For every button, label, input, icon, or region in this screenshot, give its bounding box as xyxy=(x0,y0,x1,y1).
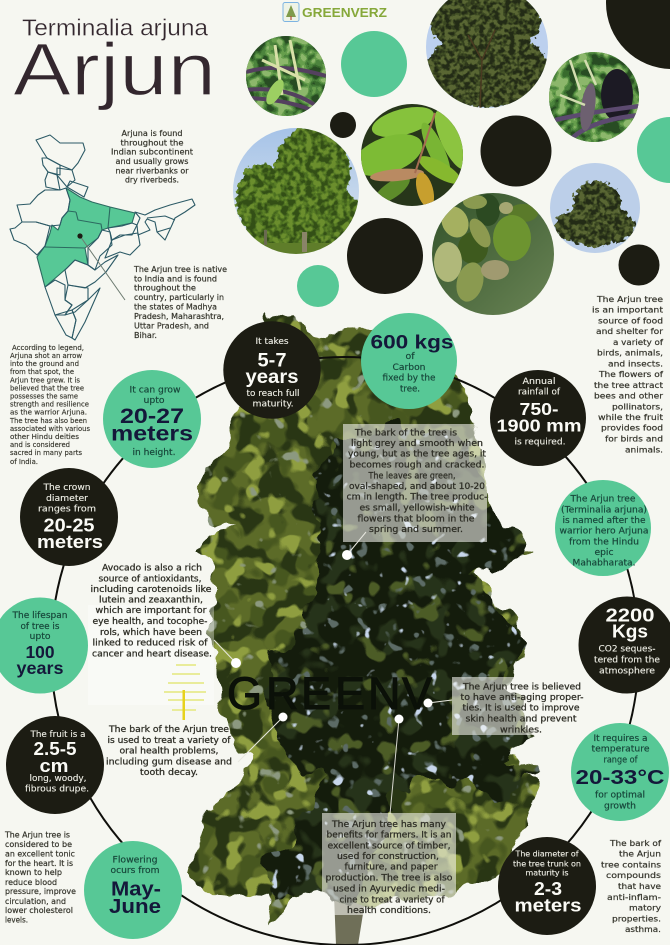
callout dot: antioxidants xyxy=(214,640,241,668)
text: native range xyxy=(133,265,227,340)
title: Arjun: Arjun xyxy=(13,28,216,111)
fact circle: trunk diameter xyxy=(498,837,596,935)
fact circle: rainfall: 1900 mm xyxy=(496,416,582,436)
text: anti-inflammatory xyxy=(601,839,661,934)
panel: anti-aging: wrinkles. xyxy=(500,725,542,735)
fact circle: fruit: cm xyxy=(40,756,68,776)
text: heart tonic: reduce blood xyxy=(5,878,57,887)
map of India xyxy=(10,135,195,340)
text: legend: as the warrior Arjuna. xyxy=(10,408,87,416)
text: oral health xyxy=(106,725,232,778)
panel: anti-aging: skin health and prevent xyxy=(466,715,577,725)
photo: tree crown against sky xyxy=(425,0,549,108)
text: wildlife: animals. xyxy=(625,445,663,454)
panel: farmers: cine to treat a variety of xyxy=(340,895,445,905)
text: anti-inflammatory: anti-inflam- xyxy=(607,893,661,902)
text: oral health: including gum disease and xyxy=(106,757,232,767)
callout dot: farmers xyxy=(390,714,404,814)
text: distribution: dry riverbeds. xyxy=(125,176,179,185)
fact circle: rainfall: Annual xyxy=(522,377,556,387)
fact circle: lifespan: upto xyxy=(30,632,50,642)
fact circle: lifespan: years xyxy=(16,658,64,678)
fact circle: CO2: Kgs xyxy=(612,620,648,641)
text: wildlife: while the fruit xyxy=(598,413,663,422)
photo: flowers and branches xyxy=(246,36,326,116)
text: distribution: Arjuna is found xyxy=(122,129,182,138)
panel: bark and leaves: es small, yellowish-white xyxy=(360,504,474,514)
fact circle: CO2: CO2 seques- xyxy=(598,645,656,655)
text: oral health: is used to treat a variety of xyxy=(108,736,231,746)
fact circle: fruit: fibrous drupe. xyxy=(25,785,89,795)
fact circle: name origin xyxy=(555,480,651,576)
fact circle: crown diameter: 20-25 xyxy=(44,515,94,536)
text: antioxidants: lutein and zeaxanthin, xyxy=(99,595,203,605)
text: native range: to India and is found xyxy=(134,274,217,283)
fact circle: crown diameter xyxy=(20,468,118,566)
text: distribution: Indian subcontinent xyxy=(111,148,193,157)
fact circle: name origin: is named after the xyxy=(562,516,646,526)
fact circle: height: 20-27 xyxy=(120,405,184,428)
panel: anti-aging xyxy=(452,677,586,735)
panel: bark and leaves: The bark of the tree is xyxy=(354,428,457,438)
text: legend: sacred in many parts xyxy=(10,448,82,457)
text: oral health: oral health problems, xyxy=(120,747,218,757)
fact circle: trunk diameter: the tree trunk on xyxy=(513,860,581,869)
fact circle: temperature: temperature xyxy=(592,745,650,755)
fact circle: name origin: (Terminalia arjuna) xyxy=(561,505,647,515)
panel: anti-aging: The Arjun tree is believed xyxy=(462,682,581,692)
panel: bark and leaves: becomes rough and cracked. xyxy=(350,460,484,470)
text: legend: and is considered xyxy=(10,440,70,449)
fact circle: flowering: June xyxy=(109,896,161,918)
fact circle: height: upto xyxy=(144,396,164,406)
text: wildlife: The flowers of xyxy=(598,370,663,379)
fact circle: name origin: The Arjun tree xyxy=(569,495,636,505)
panel: farmers: health conditions. xyxy=(347,906,431,916)
logo xyxy=(283,2,387,22)
fact circle: crown diameter: meters xyxy=(37,531,103,552)
fact circle: lifespan: The lifespan xyxy=(11,611,68,621)
text: antioxidants: eye health, and tocophe- xyxy=(92,617,208,627)
text: native range: country, particularly in xyxy=(134,293,224,302)
fact circle: temperature: for optimal xyxy=(595,791,645,801)
panel: farmers: used for construction, xyxy=(337,852,439,862)
text: legend: According to legend, xyxy=(12,343,84,352)
watermark text: GREENV xyxy=(227,668,432,719)
foliage: dark inner layer xyxy=(262,425,540,905)
text: legend: possesses the same xyxy=(10,392,78,400)
text: native range: Bihar. xyxy=(134,331,157,340)
ring connecting the facts xyxy=(51,357,639,945)
fact circle: temperature: growth xyxy=(604,801,636,811)
text: antioxidants: Avocado is also a rich xyxy=(102,563,202,573)
fact circle: fruit: 2.5-5 xyxy=(34,739,76,759)
panel: bark and leaves: cm in length. The tree produc- xyxy=(346,493,488,503)
fact circle: rainfall: rainfall of xyxy=(518,387,561,397)
watermark panel xyxy=(88,605,214,720)
text: heart tonic: known to help xyxy=(5,868,62,877)
panel: farmers: excellent source of timber, xyxy=(328,841,450,851)
text: legend: of India. xyxy=(10,457,38,466)
fact circle: flowering xyxy=(84,841,182,939)
callout dot: bark xyxy=(342,532,366,560)
fact circle: maturity: years xyxy=(246,367,298,388)
text: legend: Arjuna shot an arrow xyxy=(10,351,82,360)
fact circle: temperature: 20-33°C xyxy=(576,767,664,789)
text: anti-inflammatory: tree contains xyxy=(601,860,661,869)
fact circle: CO2: 2200 xyxy=(606,605,654,626)
fact circle: temperature: range of xyxy=(604,755,638,765)
text: heart tonic: considered to be xyxy=(5,840,72,849)
photo: winged fruits xyxy=(432,193,554,315)
text: legend: other Hindu deities xyxy=(10,432,79,441)
text: legend: strength and resilience xyxy=(10,400,89,408)
text: antioxidants: including carotenoids like xyxy=(90,585,212,595)
text: heart tonic: for the heart. It is xyxy=(5,859,73,868)
text: legend: The tree has also been xyxy=(9,416,87,425)
text: anti-inflammatory: The bark of xyxy=(609,839,661,848)
panel: farmers: benefits for farmers. It is an xyxy=(326,831,452,841)
panel: anti-aging: to have anti-aging proper- xyxy=(460,693,584,703)
highlighted states xyxy=(37,188,135,287)
text: wildlife: and insects. xyxy=(608,359,663,368)
text: antioxidants: rols, which have been xyxy=(100,628,202,638)
text: heart tonic: lower cholesterol xyxy=(5,906,73,915)
fact circle: fruit xyxy=(6,716,104,814)
text: anti-inflammatory: matory xyxy=(629,904,661,913)
fact circle: crown diameter: diameter xyxy=(46,494,88,504)
logo: GREENVERZ xyxy=(302,6,387,20)
fact circle: name origin: epic xyxy=(594,548,614,558)
text: wildlife: birds, animals, xyxy=(597,349,663,358)
foliage: olive layer xyxy=(184,310,540,920)
fact circle: maturity: 5-7 xyxy=(258,351,286,372)
map pointer xyxy=(77,233,125,300)
fact circle: fruit: long, woody, xyxy=(30,774,86,784)
fact circle: maturity: It takes xyxy=(256,337,289,347)
text: wildlife: is an important xyxy=(592,306,663,315)
tree illustration xyxy=(184,310,540,945)
fact circle: name origin: warrior hero Arjuna xyxy=(560,527,648,537)
panel: bark and leaves xyxy=(343,424,488,542)
callout dot: oral health xyxy=(238,712,288,762)
text: heart tonic: pressure, improve xyxy=(5,887,76,896)
photo: tree on blue sky xyxy=(550,163,640,253)
fact circle: maturity xyxy=(223,321,321,419)
text: anti-inflammatory: compounds xyxy=(606,871,661,880)
fact circle: rainfall xyxy=(490,370,586,466)
text: antioxidants: linked to reduced risk of xyxy=(92,639,208,649)
fact circle: trunk diameter: 2-3 xyxy=(534,879,562,899)
panel: bark and leaves: light grey and smooth when xyxy=(351,439,483,449)
panel: anti-aging: ties. It is used to improve xyxy=(462,704,580,714)
fact circle: lifespan xyxy=(0,598,88,694)
text: wildlife: for birds and xyxy=(605,435,663,444)
text: heart tonic: an excellent tonic xyxy=(5,850,75,858)
fact circle: carbon: Carbon xyxy=(392,363,426,373)
fact circle: name origin: from the Hindu xyxy=(569,537,639,547)
fact circle: trunk diameter: The diameter of xyxy=(514,850,579,859)
panel: farmers: The Arjun tree has many xyxy=(331,820,446,830)
fact circle: crown diameter: The crown xyxy=(42,483,90,493)
text: distribution: and usually grows xyxy=(116,157,188,166)
text: legend: believed that the tree xyxy=(10,384,84,392)
photo: green leaves xyxy=(361,104,463,206)
text: native range: throughout the xyxy=(134,284,196,293)
fact circle: carbon xyxy=(361,313,457,409)
fact circle: trunk diameter: maturity is xyxy=(526,869,569,878)
text: wildlife: pollinators, xyxy=(612,402,663,411)
fact circle: height: in height. xyxy=(132,448,176,458)
fact circle: trunk diameter: meters xyxy=(514,896,582,916)
fact circle: height xyxy=(103,370,201,468)
text: native range: the states of Madhya xyxy=(134,302,217,312)
text: heart tonic: levels. xyxy=(5,916,28,924)
text: legend: associated with various xyxy=(10,424,90,433)
text: oral health: tooth decay. xyxy=(140,768,198,778)
text: native range: Uttar Pradesh, and xyxy=(134,322,209,330)
panel: farmers xyxy=(322,813,456,916)
fact circle: fruit: The fruit is a xyxy=(29,730,86,740)
text: heart tonic: circulation, and xyxy=(5,897,66,906)
fact circle: lifespan: 100 xyxy=(26,642,55,662)
fact circle: rainfall: 750- xyxy=(520,399,559,419)
text: anti-inflammatory: properties. xyxy=(612,914,661,923)
text: antioxidants: which are important for xyxy=(96,606,207,616)
text: heart tonic: The Arjun tree is xyxy=(4,830,70,840)
text: wildlife: the tree attract xyxy=(594,381,663,390)
fact circle: carbon: of xyxy=(406,352,416,362)
text: native range: The Arjun tree is native xyxy=(133,265,227,274)
panel: farmers: furniture, and paper xyxy=(344,863,438,873)
fact circle: CO2: tered from the xyxy=(594,655,660,665)
text: antioxidants: cancer and heart disease. xyxy=(92,649,212,659)
callout dot: anti-aging xyxy=(424,698,452,708)
text: native range: Pradesh, Maharashtra, xyxy=(134,312,224,321)
fact circle: name origin: Mahabharata. xyxy=(572,559,636,569)
text: legend: from that spot, the xyxy=(10,367,74,376)
text: anti-inflammatory: that have xyxy=(618,882,661,891)
text: legend xyxy=(9,343,90,466)
fact circle: height: It can grow xyxy=(130,386,180,396)
panel: bark and leaves: oval-shaped, and about 10-20 xyxy=(349,482,485,492)
text: wildlife: source of food xyxy=(598,316,663,325)
fact circle: CO2: atmosphere xyxy=(599,666,655,676)
panel: bark and leaves: spring and summer. xyxy=(369,525,463,535)
fact circle: flowering: May- xyxy=(111,879,161,901)
decorative circles: black and green xyxy=(297,0,670,307)
photo: bird on a branch xyxy=(549,52,640,142)
text: heart tonic xyxy=(4,830,76,924)
panel: bark and leaves: flowers that bloom in the xyxy=(358,514,474,524)
text: wildlife: provides food xyxy=(601,424,663,433)
text: antioxidants xyxy=(90,563,212,659)
text: anti-inflammatory: asthma. xyxy=(625,925,661,934)
panel: farmers: production. The tree is also xyxy=(326,874,452,884)
text: distribution xyxy=(111,129,193,185)
fact circle: height: meters xyxy=(111,423,193,446)
fact circle: flowering: ocurs from xyxy=(110,866,160,876)
title: scientific name: Terminalia arjuna xyxy=(22,14,208,40)
panel: bark and leaves: The leaves are green, xyxy=(368,471,456,481)
fact circle: maturity: to reach full xyxy=(246,389,300,399)
text: distribution: throughout the xyxy=(120,138,184,147)
text: wildlife xyxy=(592,295,664,454)
photo: large trees xyxy=(233,126,362,255)
fact circle: temperature xyxy=(571,723,669,821)
text: legend: Arjun tree grew. It is xyxy=(10,376,80,384)
panel: farmers: used in Ayurvedic medi- xyxy=(333,885,445,895)
fact circle: carbon: fixed by the xyxy=(382,374,436,384)
fact circle: carbon: tree. xyxy=(400,385,420,395)
text: anti-inflammatory: the Arjun xyxy=(619,850,661,859)
text: wildlife: The Arjun tree xyxy=(596,295,663,304)
text: wildlife: a variety of xyxy=(613,338,663,347)
fact circle: crown diameter: ranges from xyxy=(38,505,96,515)
text: wildlife: and shelter for xyxy=(596,327,664,336)
fact circle: maturity: maturity. xyxy=(252,400,294,410)
text: antioxidants: source of antioxidants, xyxy=(98,574,202,584)
text: wildlife: bees and other xyxy=(594,392,664,401)
fact circle: rainfall: is required. xyxy=(514,437,566,447)
text: distribution: near riverbanks or xyxy=(116,166,189,175)
fact circle: carbon: 600 kgs xyxy=(370,332,454,353)
fact circle: flowering: Flowering xyxy=(112,856,158,866)
text: legend: into the ground and xyxy=(10,359,79,368)
text: oral health: The bark of the Arjun tree xyxy=(108,725,229,735)
trunk xyxy=(334,895,366,945)
fact circle: CO2 xyxy=(578,596,670,694)
fact circle: lifespan: of tree is xyxy=(20,622,60,632)
fact circle: temperature: It requires a xyxy=(594,734,648,744)
panel: bark and leaves: young, but as the tree ages, it xyxy=(348,450,487,460)
